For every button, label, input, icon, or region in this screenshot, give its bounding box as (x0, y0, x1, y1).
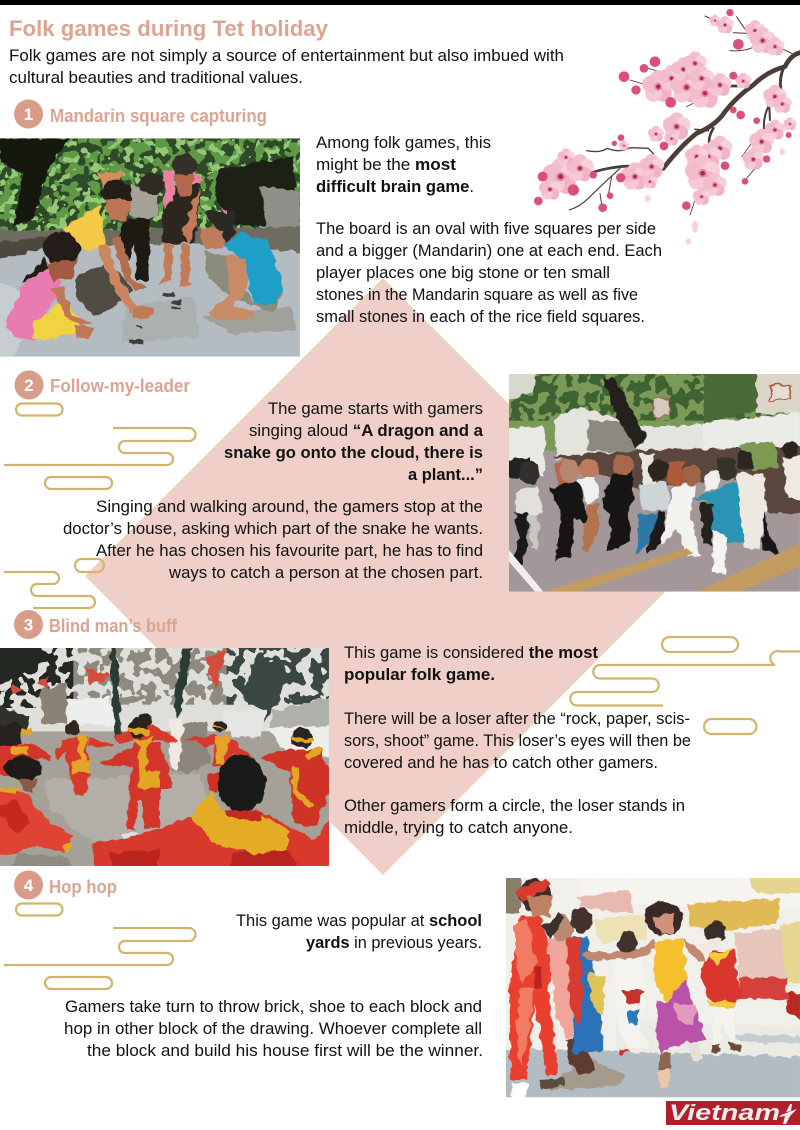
road markings (509, 543, 800, 592)
illustration: cherry blossom branch (534, 9, 800, 245)
top bar (0, 0, 800, 5)
background diamond (85, 278, 681, 875)
boy behind (128, 183, 157, 220)
centre dancer (100, 738, 173, 830)
girl in blue (572, 937, 603, 1053)
section 1 text: difficult brain game. (316, 177, 474, 196)
boy in yellow (75, 262, 133, 315)
section 1 text: and a bigger (Mandarin) one at each end. Each (316, 241, 662, 260)
section 1 text (316, 133, 662, 326)
section 3 heading: Blind man’s buff (49, 615, 178, 636)
section 3 text: This game is considered the most (344, 643, 598, 662)
boy in red and yellow (700, 950, 742, 1003)
section 3 text: covered and he has to catch other gamers. (344, 753, 658, 772)
section 1 text: stones in the Mandarin square as well as five (316, 285, 638, 304)
section 1 heading (14, 100, 267, 128)
section 2 heading: Follow-my-leader (50, 375, 190, 396)
intro text: Folk games are not simply a source of entertainment but also imbued with (9, 46, 564, 65)
section 3 text: Other gamers form a circle, the loser stands in (344, 796, 685, 815)
section 3 text: sors, shoot” game. This loser’s eyes will then be (344, 731, 691, 750)
section 1 text: The board is an oval with five squares per side (316, 219, 656, 238)
section 2 text: doctor’s house, asking which part of the snake he wants. (63, 519, 483, 538)
children row (515, 485, 542, 513)
girl in pink (546, 938, 574, 1040)
photo: children playing mandarin square capturing (0, 138, 307, 363)
hopping girl (583, 938, 657, 960)
section 3 text: There will be a loser after the “rock, paper, scis- (344, 709, 690, 728)
section 4 text: the block and build his house first will be the winner. (87, 1041, 483, 1060)
section 4 text: hop in other block of the drawing. Whoever complete all (64, 1019, 482, 1038)
crowd (553, 447, 800, 513)
decorative clouds: section 2 (4, 404, 196, 608)
girl in blue (203, 250, 283, 313)
section 3 text (344, 643, 691, 837)
logo: Vietnam+ (666, 1100, 800, 1125)
title: Folk games during Tet holiday (9, 16, 328, 41)
section 4 text: yards in previous years. (306, 933, 482, 952)
section 3 heading (14, 610, 178, 639)
decorative clouds: section 3 (570, 637, 800, 734)
right dancer (260, 750, 333, 827)
stones (130, 293, 182, 345)
section 2 text: snake go onto the cloud, there is (224, 443, 483, 462)
section 4 text (64, 911, 483, 1060)
section 3 heading: 3 (24, 616, 33, 634)
girl in pink (5, 266, 62, 339)
intro text: cultural beauties and traditional values. (9, 68, 303, 87)
photo: children playing blind man's buff (0, 640, 333, 873)
section 4 text: Gamers take turn to throw brick, shoe to each block and (65, 997, 482, 1016)
section 2 text (63, 399, 484, 582)
intro text (9, 46, 564, 87)
section 1 text: small stones in each of the rice field squares. (316, 307, 645, 326)
foreground dancer (92, 810, 329, 866)
section 3 text: middle, trying to catch anyone. (344, 818, 573, 837)
section 2 text: Singing and walking around, the gamers stop at the (96, 497, 483, 516)
section 4 text: This game was popular at school (236, 911, 482, 930)
far dancers (62, 735, 90, 797)
section 4 heading (14, 870, 117, 900)
left dancers (0, 743, 52, 777)
section 1 heading: Mandarin square capturing (50, 105, 267, 126)
logo: Vietnam+: Vietnam (669, 1100, 780, 1125)
section 2 text: ways to catch a person at the chosen part. (168, 563, 483, 582)
photo: children playing follow-my-leader (507, 367, 800, 592)
section 2 text: singing aloud “A dragon and a (249, 421, 484, 440)
decorative clouds: section 4 (4, 904, 196, 989)
standing boy (162, 177, 200, 243)
section 4 heading: Hop hop (49, 876, 117, 897)
section 1 heading: 1 (24, 105, 33, 124)
section 1 text: might be the most (316, 155, 456, 174)
section 2 text: After he has chosen his favourite part, he has to find (96, 541, 483, 560)
section 2 text: The game starts with gamers (268, 399, 483, 418)
girl in red (509, 915, 558, 1080)
section 2 text: a plant...” (408, 465, 483, 484)
small child (618, 1019, 649, 1048)
section 2 heading: 2 (24, 376, 34, 395)
section 2 heading (14, 370, 190, 400)
section 1 text: player places one big stone or ten small (316, 263, 610, 282)
section 4 heading: 4 (24, 876, 34, 895)
section 1 text: Among folk games, this (316, 133, 491, 152)
section 3 text: popular folk game. (344, 665, 495, 684)
photo: child playing hopscotch (500, 870, 800, 1103)
pavement (43, 773, 210, 847)
